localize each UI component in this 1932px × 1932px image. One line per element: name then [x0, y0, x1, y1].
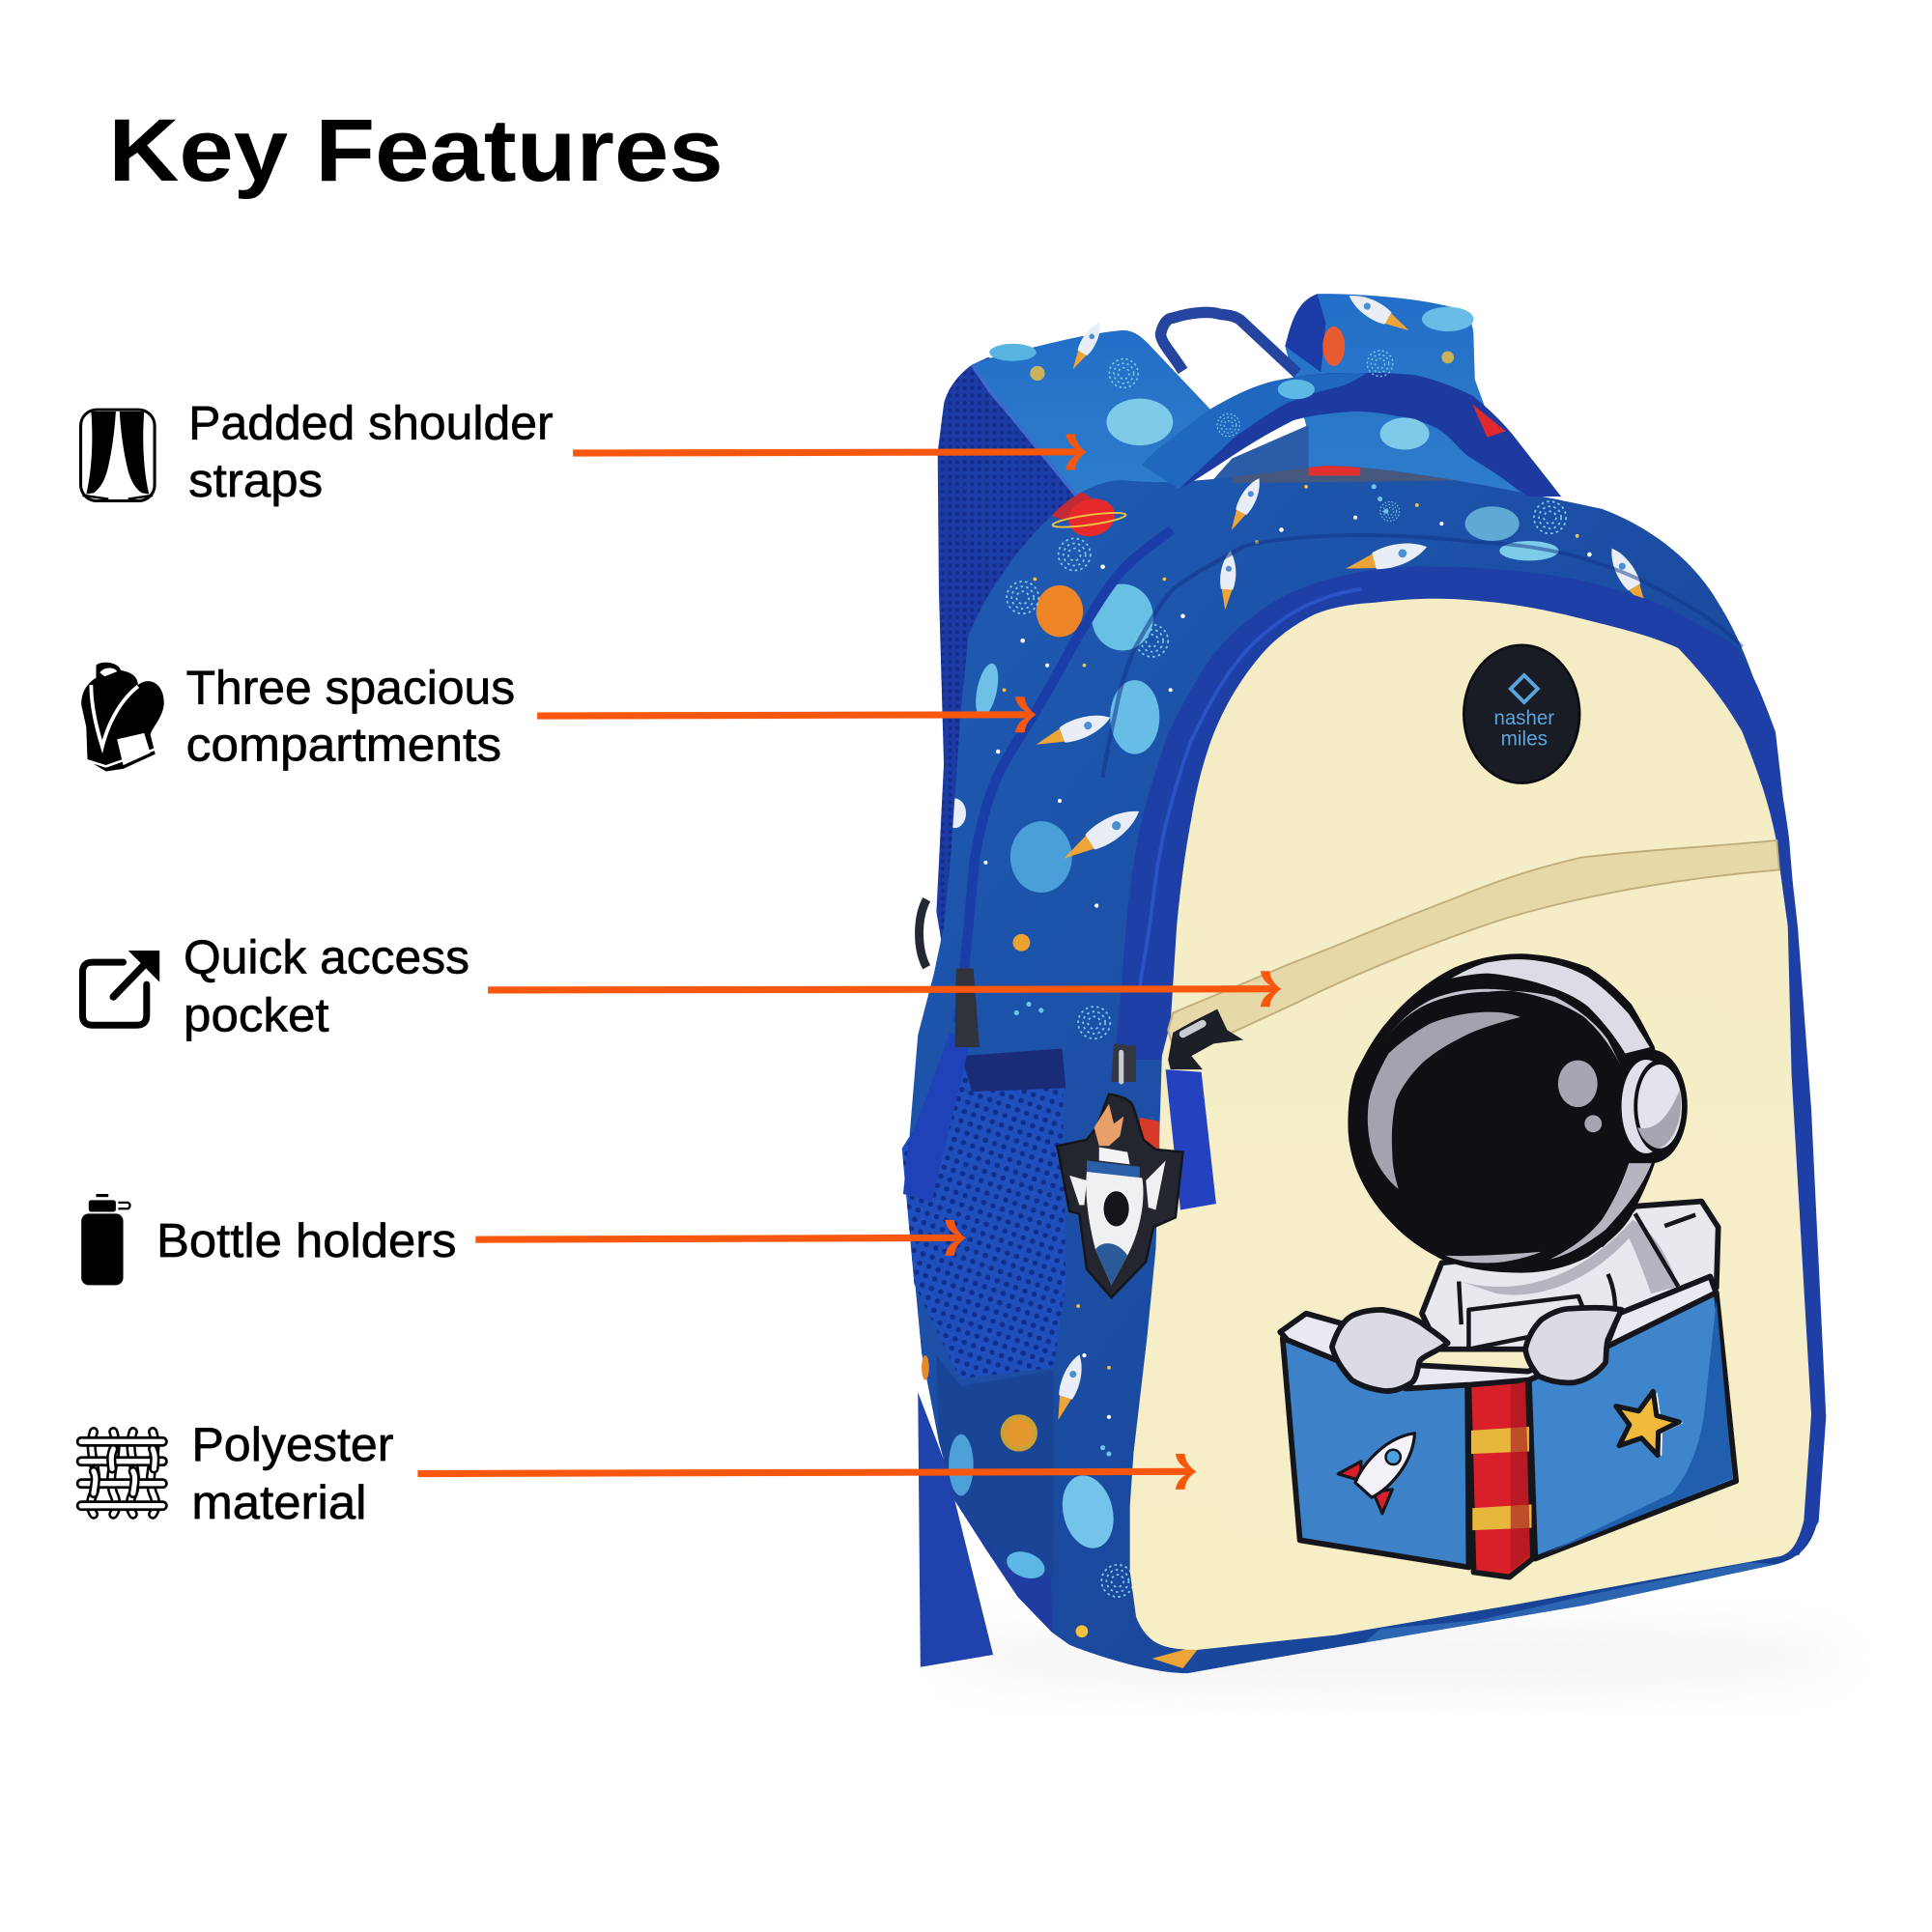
arrow: polyester material — [417, 1454, 1197, 1490]
headphone — [1616, 1050, 1688, 1163]
book — [1280, 1276, 1736, 1577]
logo badge — [1463, 645, 1579, 783]
label: Quick access — [184, 932, 469, 984]
top grab loop — [1161, 312, 1297, 373]
feature: padded shoulder straps — [81, 398, 554, 507]
astronaut body — [1422, 1202, 1719, 1350]
label: straps — [188, 455, 323, 507]
back mesh padding — [936, 357, 1109, 985]
icon: open external arrow — [82, 951, 159, 1025]
zipper pulls — [955, 969, 1243, 1210]
helmet — [1348, 953, 1663, 1273]
label: Padded shoulder — [188, 398, 554, 450]
label — [186, 662, 515, 772]
logo badge: miles — [1501, 726, 1548, 751]
zipper seams — [958, 529, 1743, 1023]
icon: backpack straps — [81, 410, 155, 500]
logo badge: nasher — [1494, 705, 1554, 729]
backpack body — [906, 466, 1825, 1673]
star sticker — [1606, 1383, 1689, 1460]
icon: woven fabric — [81, 1432, 162, 1515]
sun print — [1003, 1417, 1035, 1449]
astronaut reading a book — [1280, 953, 1736, 1577]
side buckle — [920, 899, 926, 967]
label: material — [191, 1477, 366, 1529]
feature: bottle holders — [81, 1194, 457, 1285]
feature: quick access pocket — [82, 932, 469, 1042]
feature: three compartments — [81, 662, 515, 772]
print: space pattern — [944, 288, 1811, 1668]
icon: backpack — [81, 663, 164, 771]
right shoulder strap — [1202, 294, 1528, 493]
label: Bottle holders — [156, 1215, 457, 1267]
icon: bottle — [81, 1194, 130, 1285]
label — [188, 398, 554, 507]
cream front panel — [1130, 599, 1811, 1650]
hands — [1332, 1308, 1622, 1391]
title: Key Features — [108, 101, 724, 200]
label: Three spacious — [186, 662, 515, 714]
rocket sticker — [1338, 1413, 1436, 1514]
label: pocket — [184, 990, 329, 1042]
label: Polyester — [191, 1419, 394, 1471]
label — [191, 1419, 394, 1529]
backpack illustration — [902, 288, 1848, 1694]
carry handle — [1142, 373, 1561, 497]
mesh bottle pocket — [902, 1033, 1065, 1633]
left shoulder strap — [972, 330, 1212, 497]
rocket charm — [1057, 1094, 1182, 1297]
arrow: bottle holders — [475, 1220, 966, 1256]
arrow: padded shoulder straps — [573, 434, 1087, 469]
label: compartments — [186, 720, 501, 772]
arrow: three spacious compartments — [537, 696, 1037, 732]
pocket zipper band — [1168, 840, 1779, 1060]
front panel rim — [1115, 566, 1826, 1559]
arrow: quick access pocket — [488, 971, 1282, 1007]
feature: polyester material — [81, 1419, 394, 1529]
hanging strap end — [918, 1392, 993, 1667]
label — [184, 932, 469, 1042]
